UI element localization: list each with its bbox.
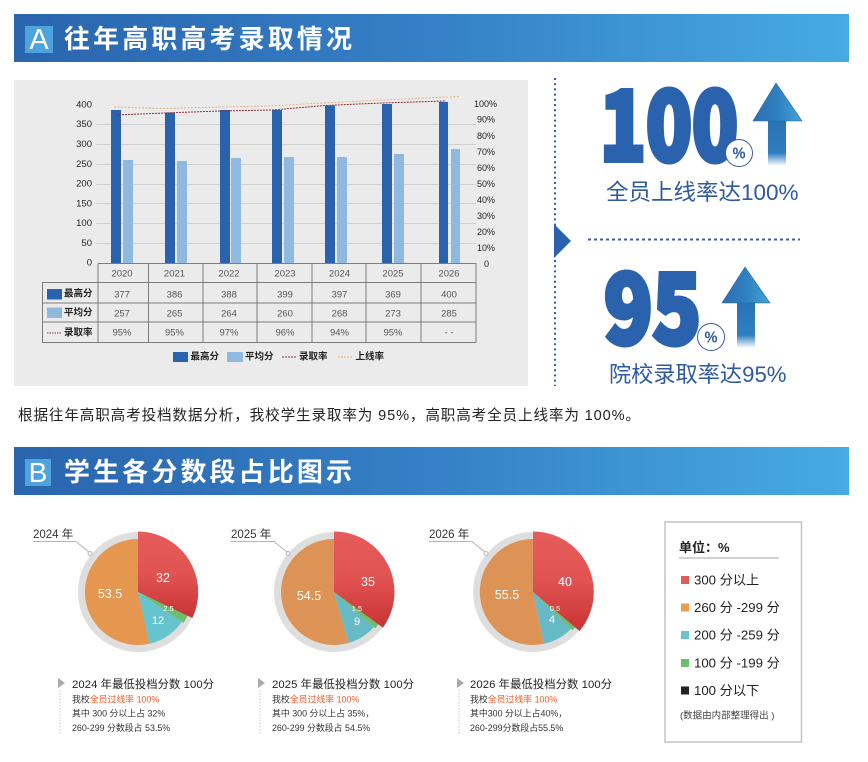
stat: 100 percent: 100 (600, 52, 738, 188)
pie chart 2024: 2.5 (163, 604, 174, 613)
caption 2024: 260-299 分数段占 53.5% (72, 722, 170, 733)
right axis labels: 30% (477, 211, 495, 221)
right axis labels: 40% (477, 195, 495, 205)
data table: 2026 (438, 268, 460, 280)
data table: 386 (167, 290, 182, 300)
pie chart 2025: 35 (361, 575, 375, 589)
year label 2026: 2026 年 (429, 527, 469, 541)
caption 2026: 我校全员过线率 100% (470, 694, 557, 704)
data table: 377 (114, 290, 130, 300)
pie chart 2026 (429, 527, 594, 652)
right axis labels: 80% (477, 131, 495, 141)
legend note: (数据由内部整理得出 ) (680, 710, 774, 722)
left axis labels: 100 (76, 218, 92, 229)
data table (42, 264, 476, 342)
right axis labels: 60% (477, 163, 495, 173)
caption 2025: 2025 年最低投档分数 100分 (272, 677, 414, 691)
legend item: 100-199: 100 分 -199 分 (694, 656, 780, 670)
icon: letter A: A (29, 24, 49, 56)
data table: 264 (221, 308, 237, 320)
caption 2025: 我校全员过线率 100% (272, 694, 359, 704)
heading A: 往年高职高考录取情况 (64, 24, 352, 54)
data table: 2022 (218, 268, 240, 280)
right axis labels: 100% (474, 99, 497, 109)
pie chart 2025: 9 (354, 616, 360, 628)
icon: up arrow (753, 83, 802, 166)
pie chart 2026: 55.5 (495, 588, 519, 602)
icon: letter A (25, 24, 53, 56)
left axis labels: 400 (76, 100, 92, 110)
pie chart 2024: 53.5 (98, 587, 122, 601)
pie chart 2026: 4 (549, 614, 555, 626)
icon: percent badge: % (704, 330, 718, 346)
data table: 257 (114, 308, 130, 320)
right axis labels (474, 99, 497, 269)
caption 2026 (457, 677, 612, 734)
data table: 273 (385, 308, 401, 320)
stat caption: 全员上线率达100% (606, 180, 799, 205)
left axis labels: 50 (81, 238, 92, 249)
bars: average score (123, 149, 460, 263)
caption 2026: 2026 年最低投档分数 100分 (470, 677, 612, 691)
left axis labels: 200 (76, 178, 92, 190)
caption 2026: 其中300 分以上占40%， (470, 708, 567, 718)
icon: letter B: B (29, 457, 47, 488)
pie chart 2026: 0.5 (550, 604, 560, 613)
data table: 397 (332, 290, 347, 300)
caption 2024: 我校全员过线率 100% (72, 694, 159, 704)
data table: 369 (385, 290, 401, 300)
data table: 2021 (164, 268, 185, 280)
icon: up arrow (722, 267, 770, 348)
pie chart 2025 (231, 527, 394, 652)
data table: 260 (277, 308, 293, 320)
legend item: 260-299: 260 分 -299 分 (694, 600, 780, 615)
left axis labels: 0 (87, 258, 92, 268)
left axis labels: 350 (76, 119, 92, 130)
year label 2024: 2024 年 (33, 527, 73, 541)
data table: 最高分 (64, 288, 93, 300)
pie chart 2024: 32 (156, 571, 170, 585)
banner B (14, 447, 849, 495)
caption 2025: 260-299 分数段占 54.5% (272, 722, 370, 733)
right axis labels: 90% (477, 114, 495, 124)
data table: 95% (112, 328, 132, 338)
data table: 285 (441, 308, 457, 320)
pie chart 2026: 40 (558, 575, 572, 589)
right axis labels: 70% (477, 147, 495, 157)
line: admission rate (116, 101, 446, 115)
data table: 2025 (382, 268, 404, 280)
caption 2025: 其中 300 分以上占 35%， (272, 708, 374, 718)
summary paragraph: 根据往年高职高考投档数据分析，我校学生录取率为 95%，高职高考全员上线率为 100%。 (18, 406, 640, 424)
year label 2025 (231, 527, 290, 556)
data table: 97% (219, 328, 239, 338)
left axis labels: 150 (76, 198, 92, 210)
year label 2026 (429, 527, 488, 556)
legend title: 单位：% (679, 540, 730, 555)
line: online rate (114, 96, 460, 108)
data table: 95% (165, 328, 185, 338)
icon: percent badge: % (732, 146, 746, 162)
data table: 95% (383, 328, 403, 338)
chart legend: 上线率 (356, 350, 385, 362)
chart legend: 最高分 (190, 350, 220, 362)
data table: 2024 (329, 268, 350, 280)
data table: 265 (167, 308, 182, 320)
divider with pointer (554, 78, 800, 386)
left axis labels: 300 (76, 139, 92, 150)
bars: highest score (111, 102, 448, 263)
heading B: 学生各分数段占比图示 (64, 457, 352, 487)
caption 2024: 2024 年最低投档分数 100分 (72, 677, 214, 691)
right axis labels: 20% (477, 227, 495, 237)
caption 2024: 其中 300 分以上占 32% (72, 708, 165, 718)
data table: 94% (330, 328, 350, 338)
data table: - - (445, 328, 453, 338)
stat: 95 percent (604, 236, 787, 387)
stat caption: 院校录取率达95% (609, 362, 787, 387)
legend item: below 100: 100 分以下 (694, 683, 759, 698)
stat: 95 percent: 95 (604, 236, 701, 372)
pie chart 2025: 54.5 (297, 589, 321, 603)
icon: percent badge (726, 140, 752, 166)
icon: percent badge (698, 324, 724, 350)
pie chart 2024: 12 (152, 615, 164, 627)
data table: 388 (221, 290, 237, 300)
year label 2024 (33, 527, 92, 556)
caption 2026: 260-299分数段占55.5% (470, 722, 563, 733)
left axis labels: 250 (76, 159, 92, 170)
data table: 2020 (111, 268, 133, 280)
data table: 268 (332, 308, 347, 320)
chart legend: 平均分 (245, 350, 274, 362)
data table: 399 (277, 290, 293, 300)
panel: chart (14, 80, 528, 386)
right axis labels: 0 (484, 259, 489, 269)
data table: 96% (275, 328, 295, 338)
right axis labels: 50% (477, 179, 495, 189)
chart legend (173, 350, 385, 362)
year label 2025: 2025 年 (231, 527, 271, 541)
caption 2025 (258, 677, 414, 734)
legend item: 200-259: 200 分 -259 分 (694, 628, 780, 642)
banner A (14, 14, 849, 62)
data table: 平均分 (64, 306, 93, 318)
data table: 录取率 (64, 326, 93, 338)
chart legend: 录取率 (299, 350, 328, 362)
caption 2024 (58, 677, 214, 734)
legend panel (665, 522, 802, 742)
left axis labels (76, 100, 92, 268)
data table: 2023 (274, 268, 296, 280)
pie chart 2024 (33, 527, 198, 652)
legend item: 300 and above: 300 分以上 (694, 572, 759, 588)
pie chart 2025: 1.5 (352, 604, 362, 613)
right axis labels: 10% (477, 243, 495, 253)
data table: 400 (441, 290, 457, 300)
